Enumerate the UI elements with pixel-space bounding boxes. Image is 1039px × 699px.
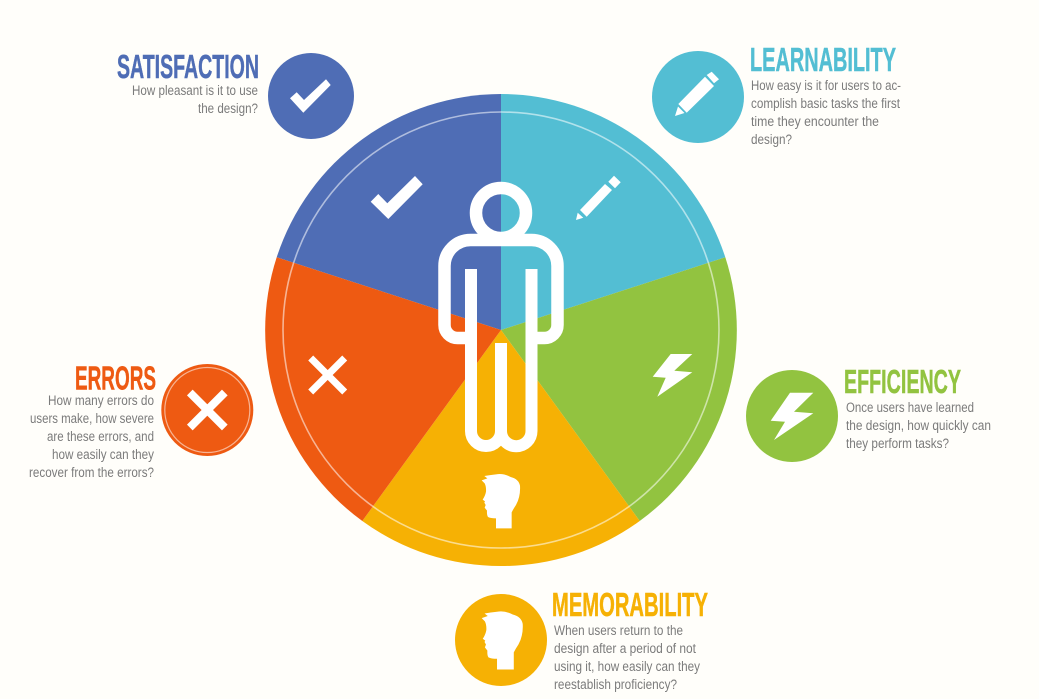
inner ring — [283, 112, 719, 548]
human figure outline — [444, 188, 558, 446]
wedge: memorability — [362, 330, 640, 566]
text: learnability description: time they encounter the — [751, 114, 879, 129]
wedge: errors — [265, 257, 501, 521]
heading: satisfaction: SATISFACTION — [117, 48, 259, 85]
text: errors description: are these errors, and — [47, 429, 154, 444]
icon: wheel pencil — [576, 176, 621, 220]
heading: learnability: LEARNABILITY — [750, 41, 896, 78]
text: learnability description: complish basic tasks the first — [751, 96, 900, 111]
icon: wheel check — [371, 176, 423, 219]
panel: errors — [29, 360, 253, 480]
heading: memorability: MEMORABILITY — [552, 586, 708, 623]
panel: efficiency — [746, 363, 991, 462]
heading: efficiency: EFFICIENCY — [844, 363, 961, 400]
text: memorability description: reestablish proficiency? — [554, 677, 677, 692]
text: errors description: users make, how severe — [30, 411, 154, 426]
panel: learnability — [652, 41, 901, 147]
text: errors description: how easily can they — [52, 447, 154, 462]
central usability wheel — [265, 94, 737, 566]
icon: wheel head silhouette — [482, 474, 520, 528]
wedge: satisfaction — [277, 94, 501, 330]
text: memorability description: using it, how easily can they — [554, 659, 700, 674]
wedge: learnability — [501, 94, 725, 330]
text: efficiency description — [846, 400, 991, 451]
text: memorability description: When users return to the — [554, 623, 683, 638]
text: errors description: How many errors do — [48, 393, 154, 408]
badge: errors — [161, 364, 253, 456]
text: efficiency description: Once users have learned — [846, 400, 974, 415]
panel: memorability — [455, 586, 708, 692]
text: errors description — [29, 393, 154, 480]
text: satisfaction description — [132, 83, 258, 116]
heading: errors: ERRORS — [75, 360, 156, 396]
text: learnability description: design? — [751, 132, 792, 147]
icon: wheel lightning bolt — [653, 354, 692, 397]
wedge: efficiency — [501, 257, 737, 521]
text: learnability description: How easy is it for users to ac- — [751, 78, 901, 93]
text: satisfaction description: the design? — [198, 101, 258, 116]
icon: wheel cross — [311, 358, 345, 392]
badge: efficiency — [746, 370, 838, 462]
text: memorability description — [554, 623, 700, 692]
text: memorability description: design after a period of not — [554, 641, 696, 656]
badge: satisfaction — [268, 53, 354, 139]
text: efficiency description: they perform tasks? — [846, 436, 949, 451]
text: efficiency description: the design, how quickly can — [846, 418, 991, 433]
badge: learnability — [652, 51, 744, 143]
badge: memorability — [455, 594, 547, 686]
text: errors description: recover from the errors? — [29, 465, 154, 480]
text: learnability description — [751, 78, 901, 147]
panel: satisfaction — [117, 48, 354, 139]
text: satisfaction description: How pleasant is it to use — [132, 83, 258, 98]
